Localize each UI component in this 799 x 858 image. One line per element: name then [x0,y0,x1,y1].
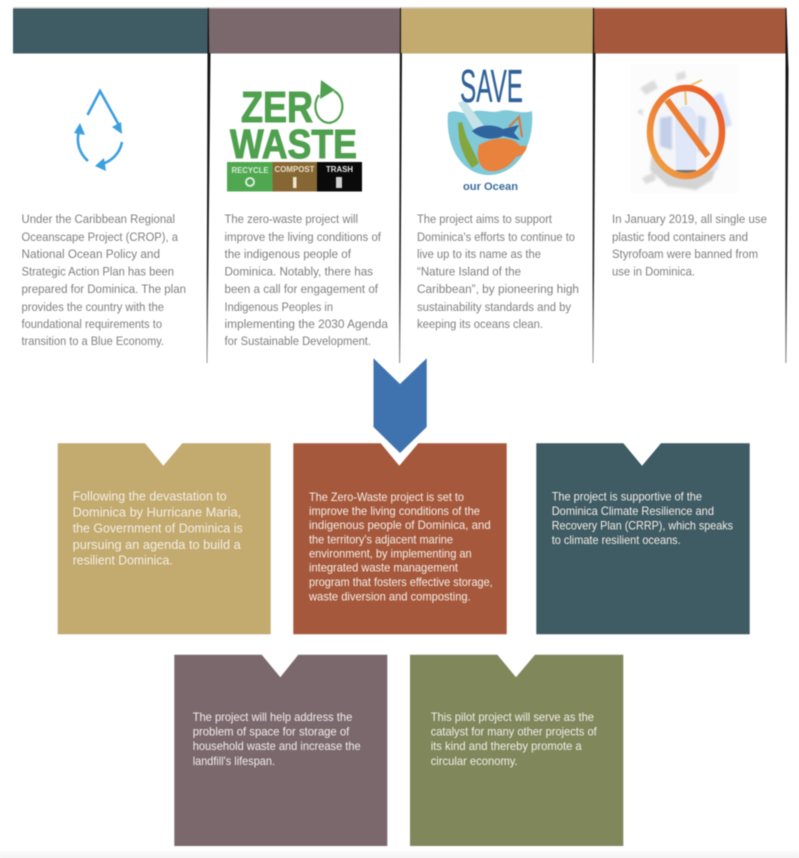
icon: recycling water drop [74,91,122,171]
text block: circular economy [431,710,597,768]
icon: Zero Waste logo [227,80,362,192]
panel: plastic ban [612,64,767,278]
text block: landfill lifespan: problem of space for storage of [193,725,350,739]
panel: Caribbean Regional Oceanscape Project [22,91,186,348]
panel: landfill lifespan card [174,655,387,846]
icon: Zero Waste logo: ZER [241,83,313,132]
text block: climate resilience: Recovery Plan (CRRP), which speaks [552,518,733,532]
text block: zero-waste description: Indigenous Peoples in [224,300,333,314]
text block: climate resilience: The project is supportive of the [552,490,702,504]
column divider 4 [785,8,788,363]
icon: Save our Ocean logo: SAVE [460,60,523,112]
text block: save our ocean description: sustainability standards and by [417,300,572,314]
header bar: gold [400,8,594,54]
text block: zero-waste outcomes [308,490,493,604]
text block: landfill lifespan: landfill's lifespan. [193,754,275,768]
text block: landfill lifespan: household waste and increase the [193,739,361,753]
text block: climate resilience: to climate resilient oceans. [552,533,681,547]
text block: zero-waste outcomes: environment, by implementing an [309,547,472,561]
text block: ban description [612,212,767,278]
text block: zero-waste outcomes: program that fosters effective storage, [309,575,493,589]
text block: ban description: use in Dominica. [612,264,695,278]
icon: Save our Ocean logo: our Ocean [463,181,518,193]
text block: zero-waste outcomes: improve the living conditions of the [309,504,480,518]
header bar: mauve [208,8,400,54]
text block: save our ocean description: Caribbean”, by pioneering high [417,282,579,296]
text block: zero-waste description: for Sustainable Development. [224,334,371,348]
text block: save our ocean description: Dominica's efforts to continue to [417,230,575,244]
text block: ban description: In January 2019, all single use [612,212,767,226]
text block: zero-waste outcomes: indigenous people of Dominica, and [309,518,491,532]
text block: ban description: plastic food containers and [612,230,748,244]
text block: CROP description: provides the country with the [22,300,164,314]
text block: CROP description: Oceanscape Project (CROP), a [22,230,178,244]
text block: CROP description: Under the Caribbean Regional [22,212,175,226]
panel: climate resilience card [536,443,750,634]
text block: save our ocean description: live up to its name as the [417,247,541,261]
icon: Save our Ocean logo [448,60,532,193]
panel: circular economy card [410,655,623,846]
text block: circular economy: circular economy. [431,754,518,768]
text block: CROP description: Strategic Action Plan has been [22,264,174,278]
text block: save our ocean description [417,212,579,331]
arrow: blue chevron pointing down [374,358,427,453]
text block: zero-waste outcomes: the territory's adjacent marine [309,532,453,546]
text block: zero-waste outcomes: waste diversion and composting. [308,590,471,604]
icon: Zero Waste logo: RECYCLE [232,166,269,175]
text block: zero-waste description: improve the living conditions of [224,230,382,244]
text block: resilient Dominica: resilient Dominica. [73,554,173,568]
text block: CROP description: prepared for Dominica. The plan [22,282,186,296]
icon: Zero Waste logo: COMPOST [274,165,315,174]
text block: ban description: Styrofoam were banned from [612,247,758,261]
text block: circular economy: catalyst for many other projects of [431,725,597,739]
column divider 1 [206,8,210,363]
text block: resilient Dominica: Dominica by Hurricane Maria, [73,506,241,520]
text block: landfill lifespan: The project will help address the [193,710,353,724]
header bar: rust [594,8,786,54]
text block: zero-waste description [224,212,388,348]
icon: Zero Waste logo: TRASH [326,165,353,174]
text block: CROP description: National Ocean Policy and [22,247,160,261]
text block: zero-waste description: the indigenous people of [224,247,352,261]
text block: resilient Dominica [73,490,243,568]
text block: zero-waste description: been a call for engagement of [224,282,379,296]
text block: resilient Dominica: Following the devastation to [73,490,227,504]
text block: circular economy: its kind and thereby promote a [431,739,582,753]
text block: CROP description: foundational requirements to [22,317,162,331]
panel: resilient Dominica card [58,443,271,634]
text block: CROP description [22,212,186,348]
text block: zero-waste outcomes: integrated waste management [309,561,459,575]
text block: resilient Dominica: the Government of Dominica is [73,522,243,536]
text block: climate resilience: Dominica Climate Resilience and [552,504,714,518]
column divider 3 [592,8,596,363]
text block: zero-waste outcomes: The Zero-Waste project is set to [309,490,464,504]
panel: Zero Waste project [224,80,388,348]
panel: zero-waste outcomes card [293,443,507,634]
text block: resilient Dominica: pursuing an agenda to build a [73,538,241,552]
text block: circular economy: This pilot project will serve as the [431,710,594,724]
icon: Zero Waste logo: WASTE [230,121,357,167]
text block: landfill lifespan [193,710,361,768]
icon: no single-use plastic [631,64,738,193]
text block: save our ocean description: “Nature Island of the [417,264,521,278]
text block: zero-waste description: Dominica. Notably, there has [224,264,373,278]
text block: zero-waste description: implementing the 2030 Agenda [224,317,388,331]
text block: zero-waste description: The zero-waste project will [224,212,358,226]
text block: climate resilience [552,490,733,547]
text block: save our ocean description: keeping its oceans clean. [417,317,543,331]
text block: CROP description: transition to a Blue Economy. [22,334,164,348]
header bar: teal [13,8,208,54]
column divider 2 [399,8,402,363]
panel: Save our Ocean project [417,60,579,331]
text block: save our ocean description: The project aims to support [417,212,552,226]
